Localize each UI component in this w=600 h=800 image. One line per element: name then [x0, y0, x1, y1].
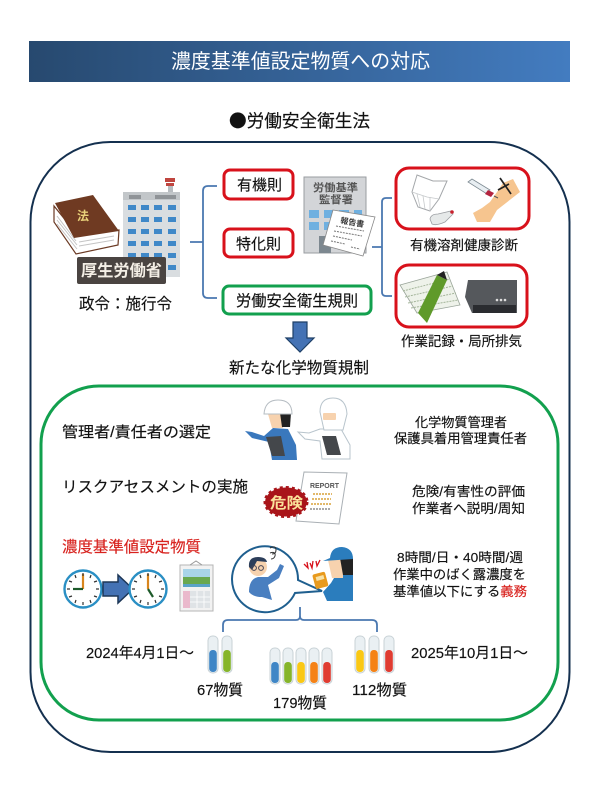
icon: arm with syringe: [468, 178, 520, 222]
panel: outer frame: [30, 142, 570, 752]
text: 基準値以下にする義務: 基準値以下にする義務: [393, 583, 527, 599]
icon: pointing workers: [245, 398, 350, 460]
icon: speech bubble with collapsed worker: [232, 546, 322, 612]
box: 労働安全衛生規則: [223, 286, 371, 314]
title banner: [29, 41, 570, 82]
icon: labour inspection office with report: 報告書: [340, 215, 365, 229]
icon: notebook: [400, 272, 460, 313]
text: 管理者/責任者の選定: 管理者/責任者の選定: [62, 423, 211, 441]
icon: local exhaust hood: [465, 280, 517, 313]
icon: urine cup: [412, 175, 447, 211]
text: 作業者へ説明/周知: 作業者へ説明/周知: [412, 501, 525, 516]
bracket: report to examples: [372, 198, 392, 296]
icon: clock start: [64, 570, 102, 608]
text: 作業記録・局所排気: 作業記録・局所排気: [401, 334, 522, 349]
bracket: ministry to rules: [190, 186, 217, 298]
heading: 濃度基準値設定物質: 濃度基準値設定物質: [62, 538, 201, 556]
panel: new regulation: [41, 386, 558, 720]
text: 8時間/日・40時間/週: 8時間/日・40時間/週: [397, 550, 523, 565]
test tubes: 67 substances: [208, 636, 232, 673]
arrow: down to new regulation: [286, 322, 314, 352]
box: 特化則: [224, 229, 293, 257]
icon: wall calendar: [180, 561, 213, 611]
test tubes: 112 substances: [355, 636, 394, 673]
text: 有機溶剤健康診断: 有機溶剤健康診断: [410, 237, 518, 253]
label: 厚生労働省: [77, 257, 166, 284]
box: 特化則: 特化則: [236, 236, 281, 253]
icon: labour inspection office with report: 労働基準: [313, 181, 359, 194]
icon: labour inspection office with report: 監督署: [319, 193, 353, 206]
arrow: clock to clock: [103, 575, 133, 603]
text: 作業中のばく露濃度を: 作業中のばく露濃度を: [393, 567, 526, 582]
text: 2024年4月1日: 2024年4月1日～: [86, 645, 194, 662]
box: 有機則: [224, 170, 293, 199]
icon: worker with gas detector: [304, 547, 353, 601]
icon: green pencil: [418, 271, 447, 323]
text: リスクアセスメントの実施: リスクアセスメントの実施: [62, 478, 248, 496]
text: 保護具着用管理責任者: 保護具着用管理責任者: [394, 430, 527, 446]
title banner: 濃度基準値設定物質への対応: [171, 50, 430, 73]
text: 112物質: 112物質: [352, 681, 407, 699]
label: 厚生労働省: 厚生労働省: [81, 262, 162, 280]
text: 化学物質管理者: 化学物質管理者: [415, 415, 507, 430]
box: 有機則: 有機則: [237, 177, 282, 194]
text: 新たな化学物質規制: 新たな化学物質規制: [229, 359, 369, 377]
bracket: to test tube groups: [223, 607, 377, 632]
icon: labour inspection office with report: [304, 177, 375, 256]
icon: clock end: [130, 570, 166, 608]
text: 179物質: 179物質: [273, 694, 327, 712]
icon: ministry building: [123, 178, 180, 277]
icon: danger report: REPORT: [310, 483, 340, 490]
box: 労働安全衛生規則: 労働安全衛生規則: [236, 293, 358, 310]
text: 67物質: 67物質: [197, 681, 243, 699]
text: 政令: 政令：施行令: [79, 295, 172, 313]
text: 危険/有害性の評価: 危険/有害性の評価: [412, 484, 525, 499]
panel: 有機溶剤健康診断: [396, 168, 529, 229]
icon: danger report: [265, 472, 347, 524]
icon: law book: 法: [77, 208, 89, 223]
test tubes: 179 substances: [270, 648, 332, 684]
heading: 労働安全衛生法: ●労働安全衛生法: [229, 108, 370, 133]
panel: 作業記録・局所排気: [396, 265, 527, 327]
icon: danger report: 危険: [270, 494, 303, 512]
text: 2025年10月1日: 2025年10月1日～: [411, 645, 528, 662]
icon: sample bottle: [430, 210, 454, 225]
icon: law book: [54, 195, 119, 254]
